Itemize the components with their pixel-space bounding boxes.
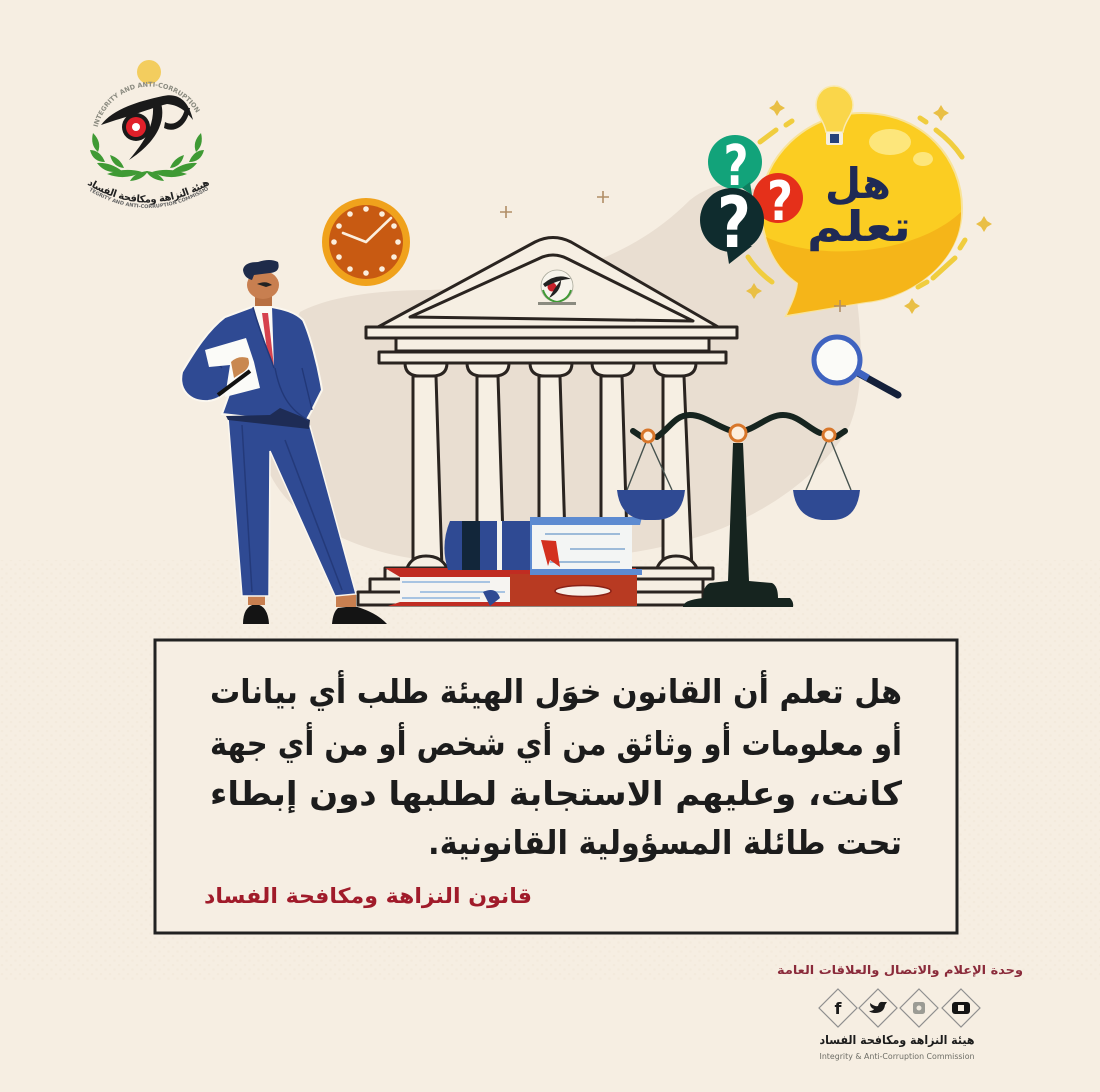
pen [218,371,250,395]
bubble highlights [869,129,933,166]
bubble title line two: تعلم [807,202,911,251]
logo ring text: INTEGRITY AND ANTI-CORRUPTION [93,82,200,127]
footer commission english name: Integrity & Anti-Corruption Commission [820,1052,974,1061]
red book [385,568,637,606]
head [247,271,279,299]
bubble decorative sparkles and dashes [746,100,992,314]
temple [358,238,737,605]
trousers [228,418,356,596]
clock icon [322,198,410,286]
pediment mini logo [538,270,576,305]
temple pediment [378,238,720,328]
logo eye [122,113,150,141]
speech bubble [700,86,992,316]
scale left strings [627,437,672,490]
logo laurel [90,133,204,181]
question mark: green: ? [724,134,748,199]
logo sun [137,60,161,84]
text line 2: أو معلومات أو وثائق من أي شخص أو من أي جهة [210,722,902,764]
social icon: facebook: f [835,999,843,1018]
pediment inner triangle [410,255,693,321]
man figure [181,260,387,624]
scale pivots [642,425,835,442]
temple upper beam [366,327,737,338]
left pan [617,490,685,520]
stacked books [385,517,642,606]
moustache [257,282,272,287]
bubble lower shade [766,212,961,315]
temple steps [358,568,713,605]
magnifying glass icon [814,337,898,395]
panel box [155,640,957,933]
small plus marks [500,191,846,312]
scale beam [633,415,845,437]
social icon: youtube [942,989,980,1027]
halftone dots [0,560,1100,980]
hand [231,357,249,378]
text line 1: هل تعلم أن القانون خوَل الهيئة طلب أي بيانات [210,670,902,712]
temple frieze [396,338,709,351]
document [205,338,260,397]
logo english name: INTEGRITY AND ANTI-CORRUPTION COMMISSION [90,187,208,208]
balance scale [617,415,860,607]
bubble body [761,113,962,316]
text panel [155,640,957,933]
text line 4: تحت طائلة المسؤولية القانونية. [428,823,902,863]
bubble title line one: هل [825,159,891,208]
social icon: twitter [859,989,897,1027]
scale post and base [683,443,793,607]
neck [255,295,272,311]
scale right strings [806,436,851,490]
lightbulb icon [816,86,853,145]
waist shadow [226,408,310,429]
question mark: green [708,134,762,199]
question mark: red [753,170,803,233]
question mark: red: ? [767,170,793,233]
background blob [268,185,861,562]
tie [262,313,274,367]
jacket [181,307,322,423]
blue book [444,517,642,575]
footer [777,963,1023,1061]
logo bird [101,95,193,160]
hair [243,260,279,280]
shoes [243,604,387,624]
footer commission arabic name: هيئة النزاهة ومكافحة الفساد [820,1033,974,1048]
right pan [793,490,860,520]
question mark: dark [700,182,764,264]
source line: قانون النزاهة ومكافحة الفساد [204,884,532,908]
logo [88,60,209,208]
trouser creases [242,425,342,592]
question mark: dark: ? [717,182,751,264]
ankles [248,594,356,607]
logo arabic name: هيئة النزاهة ومكافحة الفساد [88,180,209,205]
columns [405,363,697,570]
social icon: facebook [819,989,857,1027]
jacket details [208,307,312,420]
shirt [253,307,274,368]
body text [210,670,903,863]
temple lower beam [379,352,726,363]
text line 3: كانت، وعليهم الاستجابة لطلبها دون إبطاء [210,774,903,814]
footer unit name: وحدة الإعلام والاتصال والعلاقات العامة [777,963,1023,978]
social icon: instagram [900,989,938,1027]
